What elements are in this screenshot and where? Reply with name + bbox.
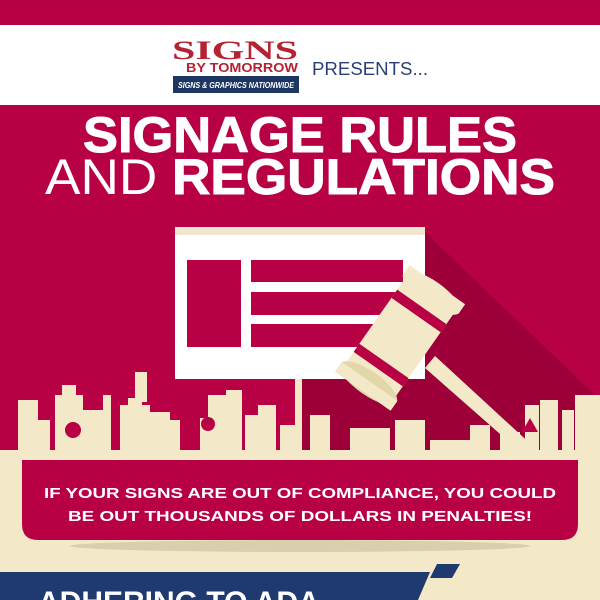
title: AND REGULATIONS bbox=[45, 149, 555, 205]
presents text: PRESENTS... bbox=[312, 59, 428, 79]
top crimson strip bbox=[0, 0, 600, 25]
crimson hero background bbox=[0, 105, 600, 455]
callout: BE OUT THOUSANDS OF DOLLARS IN PENALTIES! bbox=[68, 508, 532, 525]
shadow diagonal bbox=[300, 232, 600, 455]
callout: IF YOUR SIGNS ARE OUT OF COMPLIANCE, YOU COULD bbox=[44, 485, 556, 502]
logo bbox=[172, 36, 299, 93]
title bbox=[45, 107, 555, 205]
title: SIGNAGE RULES bbox=[83, 107, 517, 163]
logo: BY TOMORROW bbox=[186, 60, 299, 75]
billboard bbox=[175, 227, 425, 453]
gavel bbox=[334, 264, 535, 456]
header band bbox=[0, 25, 600, 105]
callout bbox=[22, 460, 578, 552]
logo: SIGNS & GRAPHICS NATIONWIDE bbox=[178, 81, 295, 90]
skyline bbox=[0, 372, 600, 460]
section header: ADA bbox=[0, 564, 460, 600]
logo: SIGNS bbox=[172, 36, 298, 65]
